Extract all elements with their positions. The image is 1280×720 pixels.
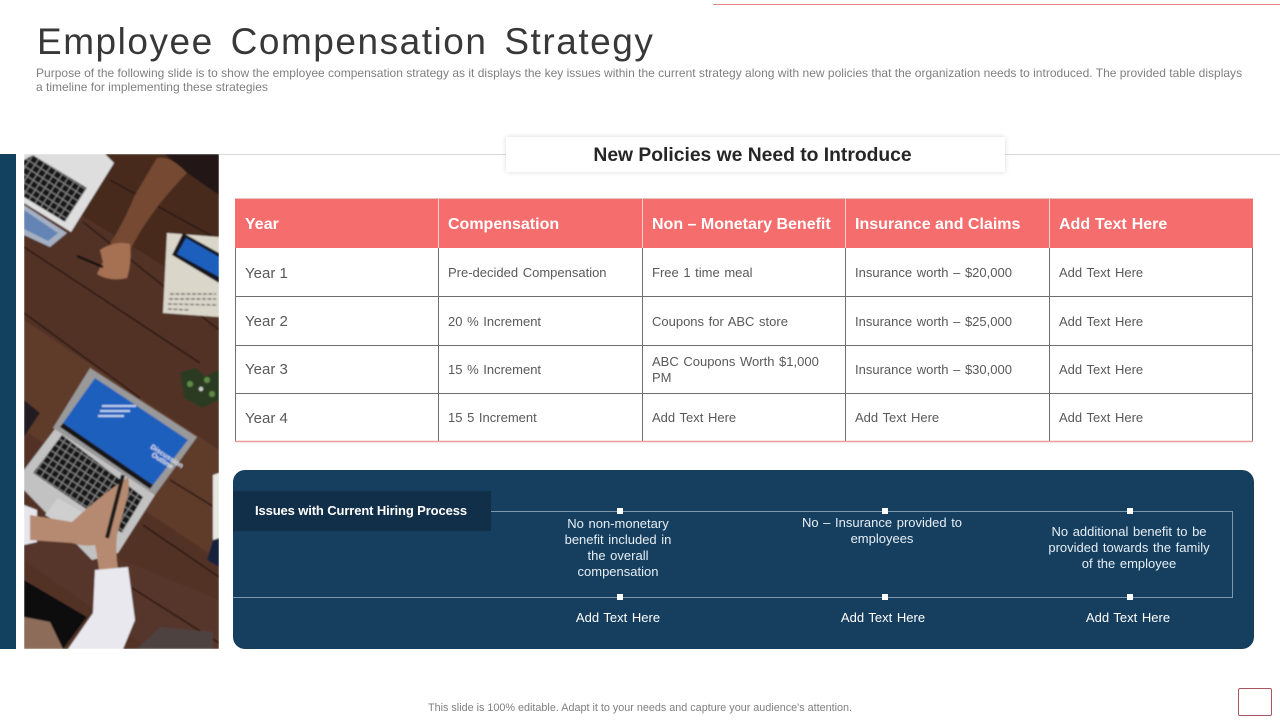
row: year 2: Year 2 bbox=[245, 313, 288, 330]
add text 1: Add Text Here bbox=[576, 610, 660, 625]
row: year 1: Pre-decided Compensation bbox=[448, 265, 607, 280]
header labels: Compensation bbox=[448, 216, 559, 233]
row: year 1: Insurance worth – $20,000 bbox=[855, 265, 1012, 280]
row: year 3: Year 3 bbox=[245, 361, 288, 378]
photo: team at a wooden desk with laptops: Discussion bbox=[149, 444, 184, 470]
photo: team at a wooden desk with laptops bbox=[24, 154, 219, 649]
row: year 1: Year 1 bbox=[245, 265, 288, 282]
section heading box bbox=[506, 137, 1005, 172]
table header band bbox=[235, 199, 1253, 248]
issue 1 bbox=[565, 516, 671, 579]
row: year 2: 20 % Increment bbox=[448, 314, 541, 329]
issue 1: No non-monetary bbox=[567, 516, 669, 531]
issue 3 bbox=[1048, 524, 1210, 571]
row: year 3: 15 % Increment bbox=[448, 362, 541, 377]
row: year 1: Free 1 time meal bbox=[652, 265, 753, 280]
issue 3: No additional benefit to be bbox=[1051, 524, 1207, 539]
issue 2: No – Insurance provided to bbox=[802, 515, 962, 530]
panel: issues with current hiring process bbox=[233, 470, 1254, 649]
empty red-outlined button bbox=[1238, 688, 1272, 716]
panel label bbox=[233, 491, 491, 531]
row: year 2: Coupons for ABC store bbox=[652, 314, 788, 329]
title: Employee Compensation Strategy bbox=[37, 21, 654, 62]
add text 3: Add Text Here bbox=[1086, 610, 1170, 625]
issue 3: of the employee bbox=[1082, 556, 1176, 571]
panel label: Issues with Current Hiring Process bbox=[255, 503, 467, 518]
row: year 3: Insurance worth – $30,000 bbox=[855, 362, 1012, 377]
row: year 4: Year 4 bbox=[245, 410, 288, 427]
issue 1: the overall bbox=[588, 548, 648, 563]
row: year 4: Add Text Here bbox=[1059, 410, 1143, 425]
row: year 4: 15 5 Increment bbox=[448, 410, 537, 425]
row: year 3 bbox=[245, 354, 1143, 385]
row: year 3: ABC Coupons Worth $1,000 bbox=[652, 354, 819, 369]
description text: a timeline for implementing these strategies bbox=[36, 80, 268, 94]
row: year 2: Add Text Here bbox=[1059, 314, 1143, 329]
footer note: This slide is 100% editable. Adapt it to your needs and capture your audience's attention. bbox=[428, 702, 852, 714]
issue 2: employees bbox=[851, 531, 913, 546]
row: year 3: PM bbox=[652, 370, 672, 385]
section heading box: New Policies we Need to Introduce bbox=[593, 145, 912, 166]
issue 1: compensation bbox=[578, 564, 658, 579]
issue 1: benefit included in bbox=[565, 532, 671, 547]
left navy bar bbox=[0, 154, 16, 649]
panel connector lines bbox=[233, 511, 1233, 598]
header labels: Non – Monetary Benefit bbox=[652, 216, 831, 233]
add text 2: Add Text Here bbox=[841, 610, 925, 625]
top accent line bbox=[713, 4, 1280, 5]
row: year 2: Insurance worth – $25,000 bbox=[855, 314, 1012, 329]
row: year 4: Add Text Here bbox=[652, 410, 736, 425]
table grid bbox=[235, 198, 1253, 442]
row: year 1: Add Text Here bbox=[1059, 265, 1143, 280]
header labels: Insurance and Claims bbox=[855, 216, 1020, 233]
description text bbox=[36, 66, 1242, 94]
header labels bbox=[245, 216, 1167, 233]
row: year 2 bbox=[245, 313, 1143, 330]
row: year 3: Add Text Here bbox=[1059, 362, 1143, 377]
issue 2 bbox=[802, 515, 962, 546]
header labels: Year bbox=[245, 216, 279, 233]
photo: team at a wooden desk with laptops: Outline bbox=[150, 452, 174, 471]
description text: Purpose of the following slide is to show the employee compensation strategy as it displays the key issues within the current strategy along with new policies that the organization needs to introduced. The provided table displays bbox=[36, 66, 1242, 80]
row: year 1 bbox=[245, 265, 1143, 282]
row: year 4: Add Text Here bbox=[855, 410, 939, 425]
issue 3: provided towards the family bbox=[1048, 540, 1210, 555]
row: year 4 bbox=[245, 410, 1143, 427]
divider line bbox=[219, 154, 1280, 155]
header labels: Add Text Here bbox=[1059, 216, 1167, 233]
markers bbox=[617, 508, 1133, 600]
table: new policies bbox=[235, 198, 1253, 442]
